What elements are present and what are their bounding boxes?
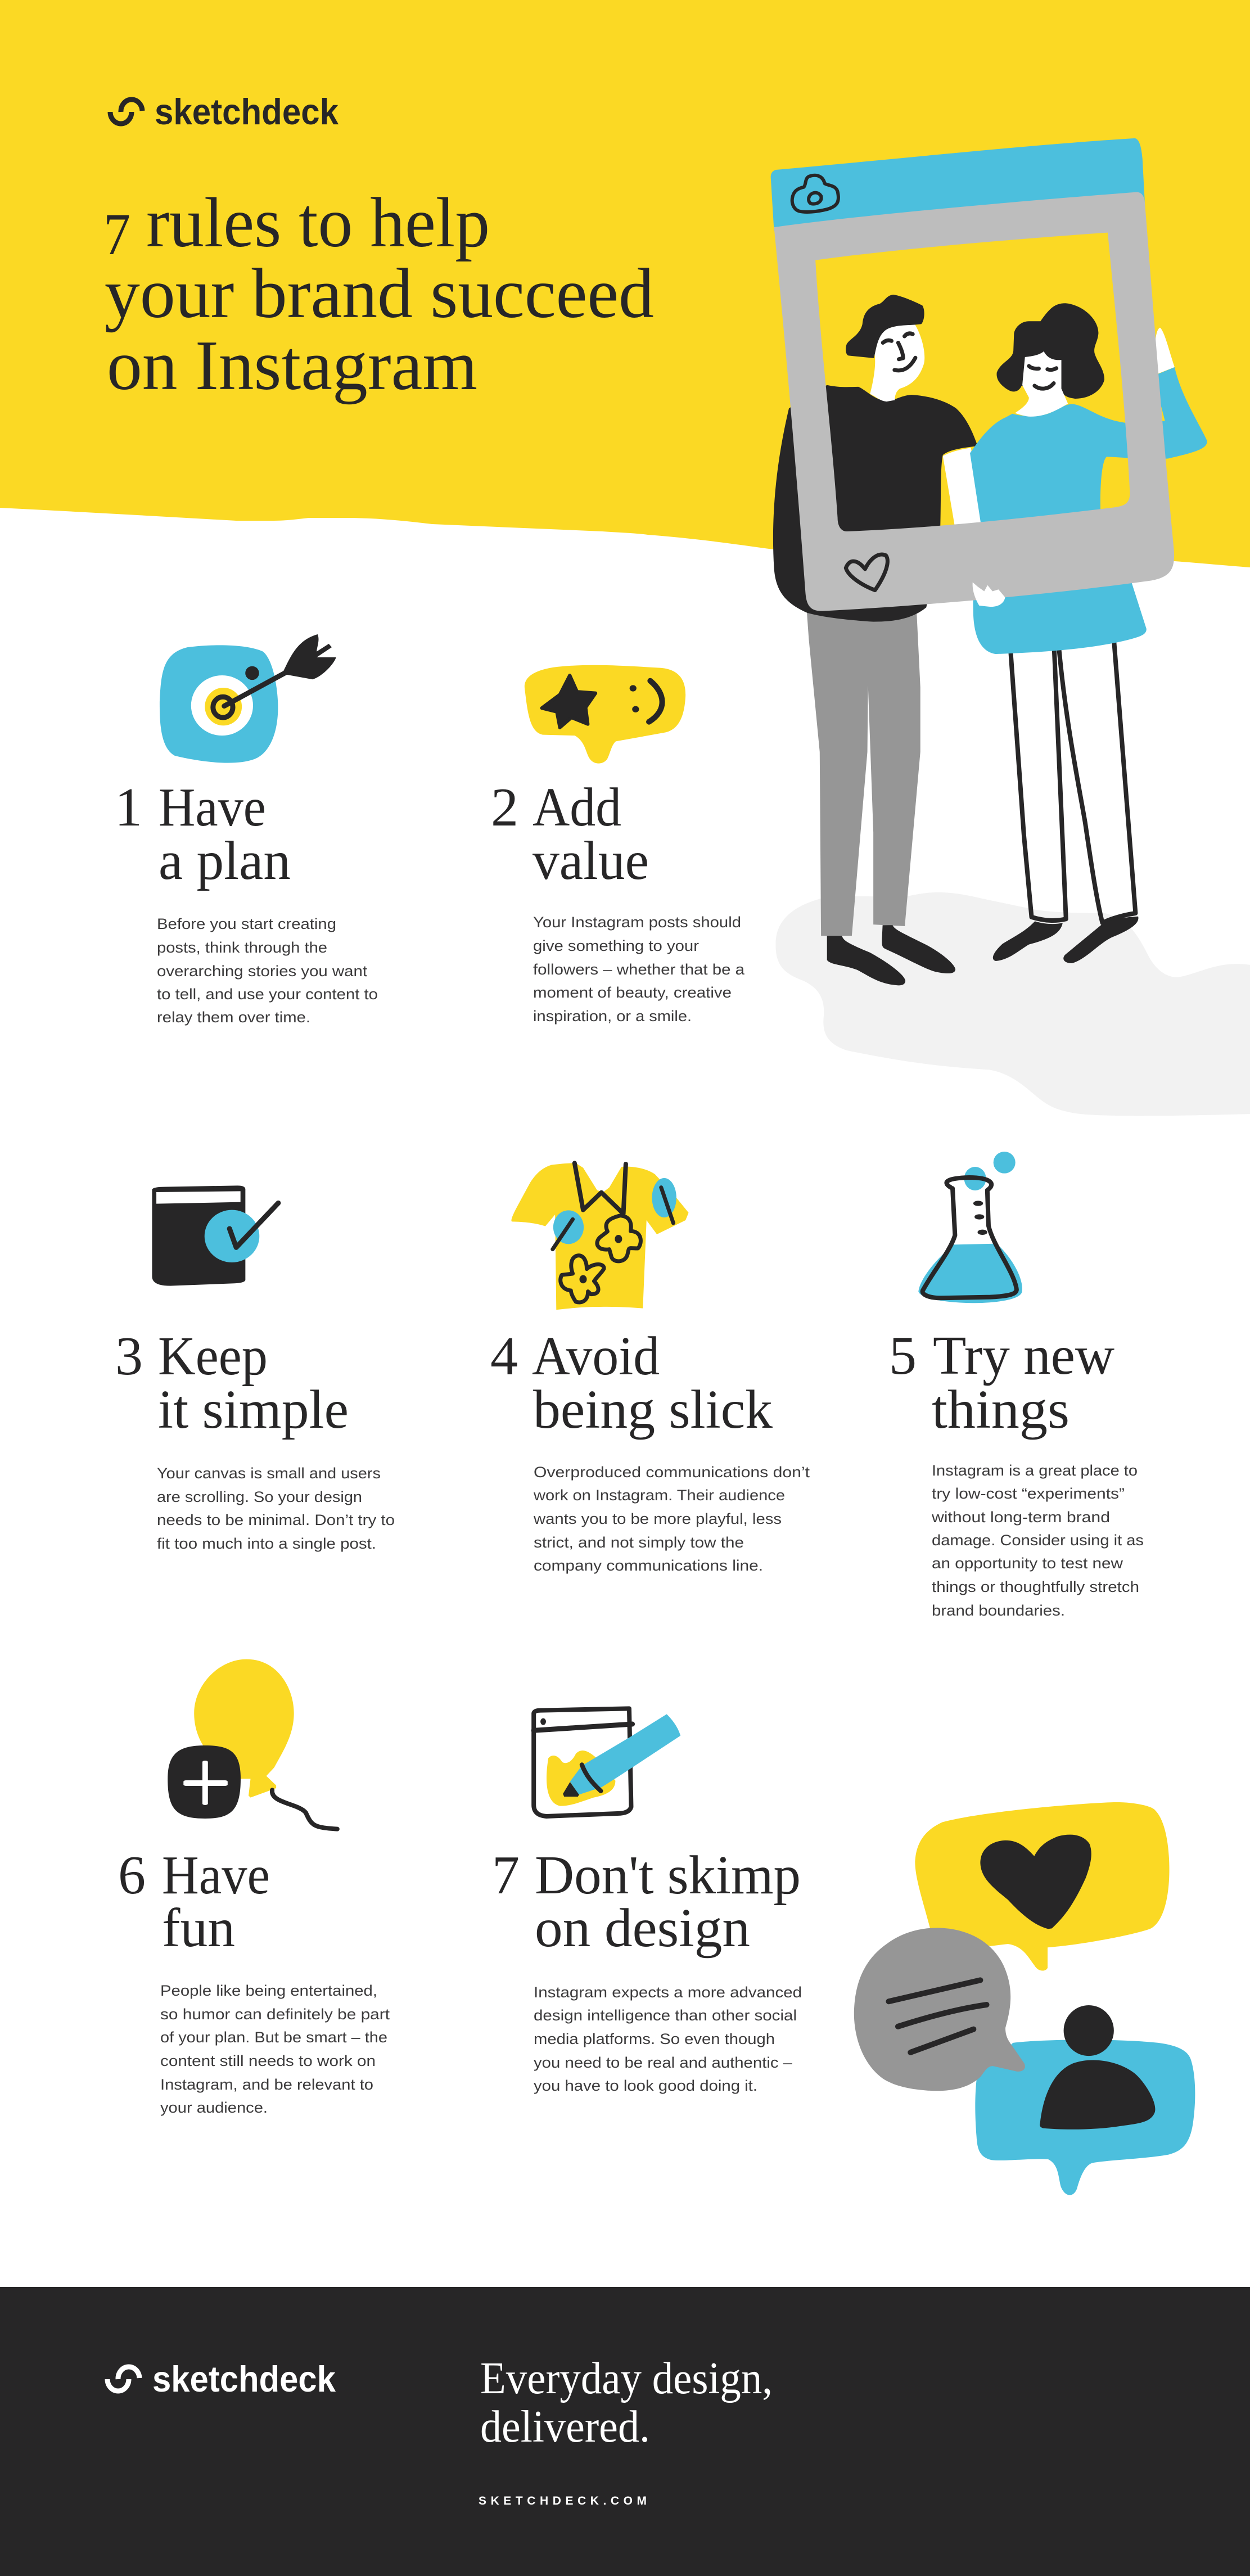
heading line 2: being slick xyxy=(533,1379,773,1440)
man's right shoe xyxy=(882,925,955,973)
icon: hawaiian shirt xyxy=(511,1163,689,1310)
body text: damage. Consider using it as xyxy=(932,1532,1144,1549)
number 5: 5 xyxy=(889,1325,917,1386)
tagline line 1: Everyday design, xyxy=(480,2354,773,2403)
rule 4: avoid being slick xyxy=(490,1163,810,1574)
illustration: couple holding Instagram frame xyxy=(771,138,1207,985)
body text: Your canvas is small and users xyxy=(157,1465,381,1482)
target tile xyxy=(160,645,278,763)
body text: Overproduced communications don’t xyxy=(534,1464,810,1481)
blue pencil xyxy=(570,1714,680,1795)
heart xyxy=(980,1835,1091,1929)
rule 3: keep it simple xyxy=(115,1185,395,1552)
heading line 2: it simple xyxy=(158,1379,349,1440)
body text: moment of beauty, creative xyxy=(533,984,732,1001)
woman's head xyxy=(997,303,1104,417)
body text: overarching stories you want xyxy=(157,963,368,980)
pencil band xyxy=(582,1765,601,1791)
person body xyxy=(1040,2060,1155,2130)
woman's hair xyxy=(997,303,1104,399)
star xyxy=(542,675,595,728)
title line 3: on Instagram xyxy=(107,327,477,405)
logo: sketchdeck xyxy=(110,91,339,132)
title line 1: rules to help xyxy=(146,184,490,262)
yellow bubble xyxy=(915,1802,1170,1971)
heading line 1: Avoid xyxy=(532,1326,660,1387)
body text: your audience. xyxy=(160,2099,268,2116)
rule 7: don't skimp on design xyxy=(492,1708,802,2094)
icon: flask xyxy=(918,1152,1022,1303)
footer background xyxy=(0,2287,1250,2576)
body text: company communications line. xyxy=(534,1557,763,1574)
man's left shoe xyxy=(827,936,905,985)
icon: window with pencil xyxy=(534,1708,680,1816)
body text: try low-cost “experiments” xyxy=(932,1485,1125,1502)
woman's lower hand xyxy=(973,583,1005,607)
illustration: speech bubbles xyxy=(854,1802,1195,2195)
logo wordmark: sketchdeck xyxy=(155,91,339,132)
body text xyxy=(157,1465,395,1552)
body text: posts, think through the xyxy=(157,939,327,956)
man's torso xyxy=(773,385,978,622)
smile mouth xyxy=(649,681,662,722)
woman's left shoe xyxy=(993,921,1063,961)
dark window xyxy=(152,1185,245,1286)
icon: heart outline xyxy=(846,554,887,590)
body text: needs to be minimal. Don’t try to xyxy=(157,1512,395,1528)
trousers xyxy=(806,607,920,936)
icon: speech bubble with star and smile xyxy=(525,665,685,764)
people and frame xyxy=(771,138,1207,654)
rule 5: try new things xyxy=(889,1152,1144,1619)
title line 2: your brand succeed xyxy=(105,255,654,333)
blue header bar of post frame xyxy=(771,138,1145,231)
grey bubble xyxy=(854,1928,1025,2091)
dart feathers xyxy=(283,634,336,679)
body text: Before you start creating xyxy=(157,915,336,932)
heading line 2: things xyxy=(932,1379,1070,1440)
black plus tile xyxy=(168,1745,241,1819)
floor shadow blob xyxy=(775,892,1250,1116)
heading line 2: fun xyxy=(162,1898,235,1959)
body text: to tell, and use your content to xyxy=(157,986,378,1003)
body text: strict, and not simply tow the xyxy=(534,1534,744,1551)
text lines in grey bubble xyxy=(888,1980,987,2052)
window divider xyxy=(534,1724,633,1730)
man's hair xyxy=(846,295,924,358)
body text: Instagram is a great place to xyxy=(932,1462,1138,1479)
title numeral: 7 xyxy=(103,201,130,267)
body text: People like being entertained, xyxy=(160,1982,377,1999)
blue circle xyxy=(205,1210,259,1262)
tagline line 2: delivered. xyxy=(480,2402,650,2452)
window outline xyxy=(534,1708,631,1816)
grey post frame xyxy=(774,192,1174,611)
window title bar xyxy=(156,1191,241,1204)
woman's legs and shoes xyxy=(993,633,1138,963)
dart shaft xyxy=(224,673,286,706)
body text: brand boundaries. xyxy=(932,1602,1065,1619)
heading line 2: value xyxy=(533,831,649,891)
body text: without long-term brand xyxy=(931,1509,1110,1526)
woman's dress xyxy=(970,367,1207,654)
body text: relay them over time. xyxy=(157,1009,310,1026)
smile eyes xyxy=(630,685,639,712)
balloon xyxy=(194,1659,294,1798)
liquid xyxy=(918,1244,1022,1303)
body text xyxy=(931,1462,1144,1619)
woman's left trouser outline xyxy=(1010,639,1066,921)
footer xyxy=(0,2287,1250,2576)
heading line 2: on design xyxy=(535,1898,750,1959)
footer logo mark xyxy=(107,2367,139,2391)
balloon string xyxy=(272,1790,337,1829)
blue bubble xyxy=(975,2040,1195,2195)
bubbles xyxy=(964,1152,1016,1190)
body text: Your Instagram posts should xyxy=(533,914,741,931)
flower 2 xyxy=(561,1256,604,1302)
woman's raised hand xyxy=(1147,328,1175,376)
number 3: 3 xyxy=(115,1326,143,1387)
man's arm xyxy=(943,448,982,530)
body text xyxy=(160,1982,390,2116)
body text: content still needs to work on xyxy=(160,2052,376,2069)
window dot xyxy=(540,1718,546,1725)
body text: are scrolling. So your design xyxy=(157,1488,362,1505)
white plus xyxy=(183,1761,228,1805)
number 4: 4 xyxy=(490,1326,518,1387)
body text xyxy=(533,1464,810,1574)
body text: an opportunity to test new xyxy=(932,1555,1123,1572)
woman's facial features xyxy=(1029,366,1057,389)
body text: followers – whether that be a xyxy=(533,961,745,978)
body text: design intelligence than other social xyxy=(534,2007,797,2024)
body text: work on Instagram. Their audience xyxy=(533,1487,785,1504)
body text: Instagram expects a more advanced xyxy=(534,1984,802,2001)
body text: fit too much into a single post. xyxy=(157,1535,376,1552)
yellow bubble xyxy=(525,665,685,764)
icon: target and dart xyxy=(160,634,336,763)
flask ticks xyxy=(973,1201,987,1235)
body text: inspiration, or a smile. xyxy=(533,1008,692,1025)
icon: camera xyxy=(792,175,838,212)
number 1: 1 xyxy=(115,777,142,838)
heading line 1: Try new xyxy=(933,1325,1114,1386)
body text: you need to be real and authentic – xyxy=(534,2054,792,2071)
heading line 1: Add xyxy=(533,777,621,838)
heading line 2: a plan xyxy=(159,831,291,891)
number 2: 2 xyxy=(491,777,518,838)
footer logo wordmark: sketchdeck xyxy=(152,2358,336,2399)
check mark xyxy=(229,1203,278,1247)
yellow ring xyxy=(205,688,242,725)
yellow header background xyxy=(0,0,1250,567)
title xyxy=(103,184,654,405)
icon: window with check xyxy=(152,1185,278,1286)
body text: you have to look good doing it. xyxy=(534,2077,757,2094)
body text xyxy=(157,915,378,1026)
icon: balloon with plus xyxy=(168,1659,337,1829)
person head xyxy=(1064,2005,1114,2056)
woman's face and neck xyxy=(1015,351,1068,417)
website: SKETCHDECK.COM xyxy=(479,2494,647,2507)
white ring xyxy=(191,675,253,736)
body text xyxy=(534,1984,802,2094)
blue sleeve patches xyxy=(553,1178,676,1244)
flask outline xyxy=(923,1178,1017,1298)
body text: media platforms. So even though xyxy=(534,2031,775,2047)
rule 1: have a plan xyxy=(115,634,378,1026)
man's trousers and shoes xyxy=(806,607,955,985)
rule 6: have fun xyxy=(118,1659,390,2116)
footer logo xyxy=(107,2358,336,2399)
heading line 1: Keep xyxy=(158,1326,268,1387)
yellow shirt xyxy=(511,1163,689,1310)
body text: wants you to be more playful, less xyxy=(533,1510,782,1527)
flower 1 xyxy=(597,1216,640,1261)
man's face and neck xyxy=(870,324,924,401)
body text: things or thoughtfully stretch xyxy=(932,1578,1139,1595)
woman's right shoe xyxy=(1063,917,1138,963)
body text: of your plan. But be smart – the xyxy=(160,2029,387,2046)
woman's right trouser outline xyxy=(1059,633,1135,923)
number 7: 7 xyxy=(492,1845,520,1906)
collar xyxy=(575,1163,626,1213)
body text: give something to your xyxy=(533,937,699,954)
man's head xyxy=(846,295,924,401)
pencil tip xyxy=(563,1782,579,1797)
number 6: 6 xyxy=(118,1845,146,1906)
person icon xyxy=(1040,2005,1155,2130)
sleeve lines xyxy=(553,1188,673,1249)
yellow scribble xyxy=(547,1751,615,1806)
body text: Instagram, and be relevant to xyxy=(160,2076,373,2093)
rule 2: add value xyxy=(491,665,745,1025)
body text xyxy=(533,914,745,1025)
heading line 1: Have xyxy=(159,777,266,838)
heading line 1: Have xyxy=(162,1845,270,1906)
dot xyxy=(245,666,259,680)
man's facial features xyxy=(883,333,915,371)
body text: so humor can definitely be part xyxy=(160,2006,390,2023)
logo mark xyxy=(110,100,142,124)
black bullseye ring xyxy=(213,697,233,718)
heading line 1: Don't skimp xyxy=(535,1845,801,1906)
